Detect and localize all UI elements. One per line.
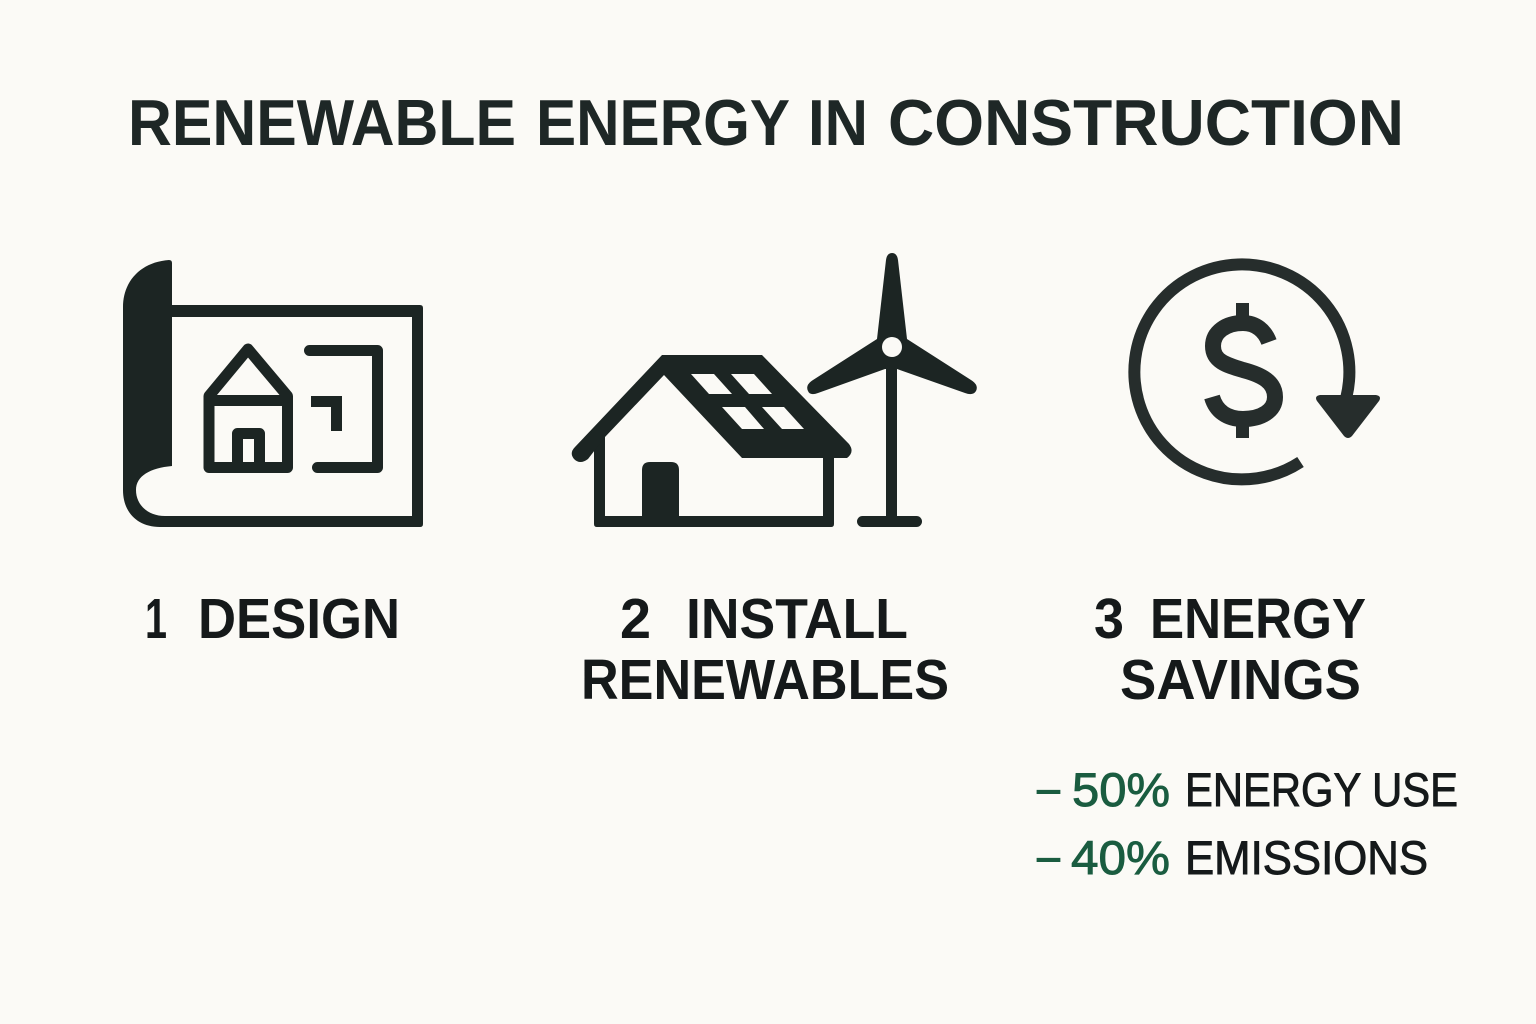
icon: dollar with circular arrow xyxy=(1134,264,1380,479)
floor plan wall outline xyxy=(310,350,378,468)
title: CONSTRUCTION xyxy=(888,86,1404,159)
step 2 label: 2 xyxy=(620,587,651,651)
step 3 label: ENERGY xyxy=(1150,587,1366,651)
step 3 label: 3 xyxy=(1094,587,1124,651)
icon: house with solar roof xyxy=(572,355,852,527)
panel: step 1 design xyxy=(123,260,423,651)
title: IN xyxy=(808,86,868,159)
step 2 label: INSTALL xyxy=(686,587,908,651)
house drawing xyxy=(209,349,288,468)
step 2 label xyxy=(581,587,949,712)
step 2 label: RENEWABLES xyxy=(581,648,949,712)
dollar sign xyxy=(1212,303,1275,438)
title: RENEWABLE xyxy=(128,86,516,159)
solar panels xyxy=(691,374,804,429)
arrow head xyxy=(1316,395,1380,438)
stat: energy use reduction: 50% xyxy=(1072,763,1170,816)
title xyxy=(128,86,1404,159)
turbine tower xyxy=(886,360,897,520)
step 3 label xyxy=(1094,587,1366,712)
stat: emissions reduction: EMISSIONS xyxy=(1185,831,1428,884)
step 1 label: DESIGN xyxy=(198,587,400,651)
icon: wind turbine xyxy=(807,253,977,527)
panel: step 3 energy savings xyxy=(1037,264,1458,884)
house walls xyxy=(594,430,834,527)
blueprint sheet with rolled edge xyxy=(123,260,423,527)
panel: step 2 install renewables xyxy=(572,253,977,712)
turbine base xyxy=(857,516,922,527)
door xyxy=(642,462,679,520)
step 3 label: SAVINGS xyxy=(1120,648,1361,712)
stat: energy use reduction: ENERGY USE xyxy=(1185,763,1458,816)
stat: energy use reduction xyxy=(1037,761,1458,816)
stat: emissions reduction: – xyxy=(1037,829,1061,882)
step 1 label: 1 xyxy=(145,587,167,651)
title: ENERGY xyxy=(536,86,790,159)
roof xyxy=(572,355,852,462)
floor plan inner wall xyxy=(311,396,342,431)
icon: blueprint with house plan xyxy=(123,260,423,527)
stat: energy use reduction: – xyxy=(1037,761,1061,814)
turbine blades xyxy=(807,253,977,394)
stat: emissions reduction: 40% xyxy=(1071,831,1170,884)
stat: emissions reduction xyxy=(1037,829,1428,884)
circular arrow ring xyxy=(1134,264,1349,479)
turbine hub xyxy=(882,337,902,357)
